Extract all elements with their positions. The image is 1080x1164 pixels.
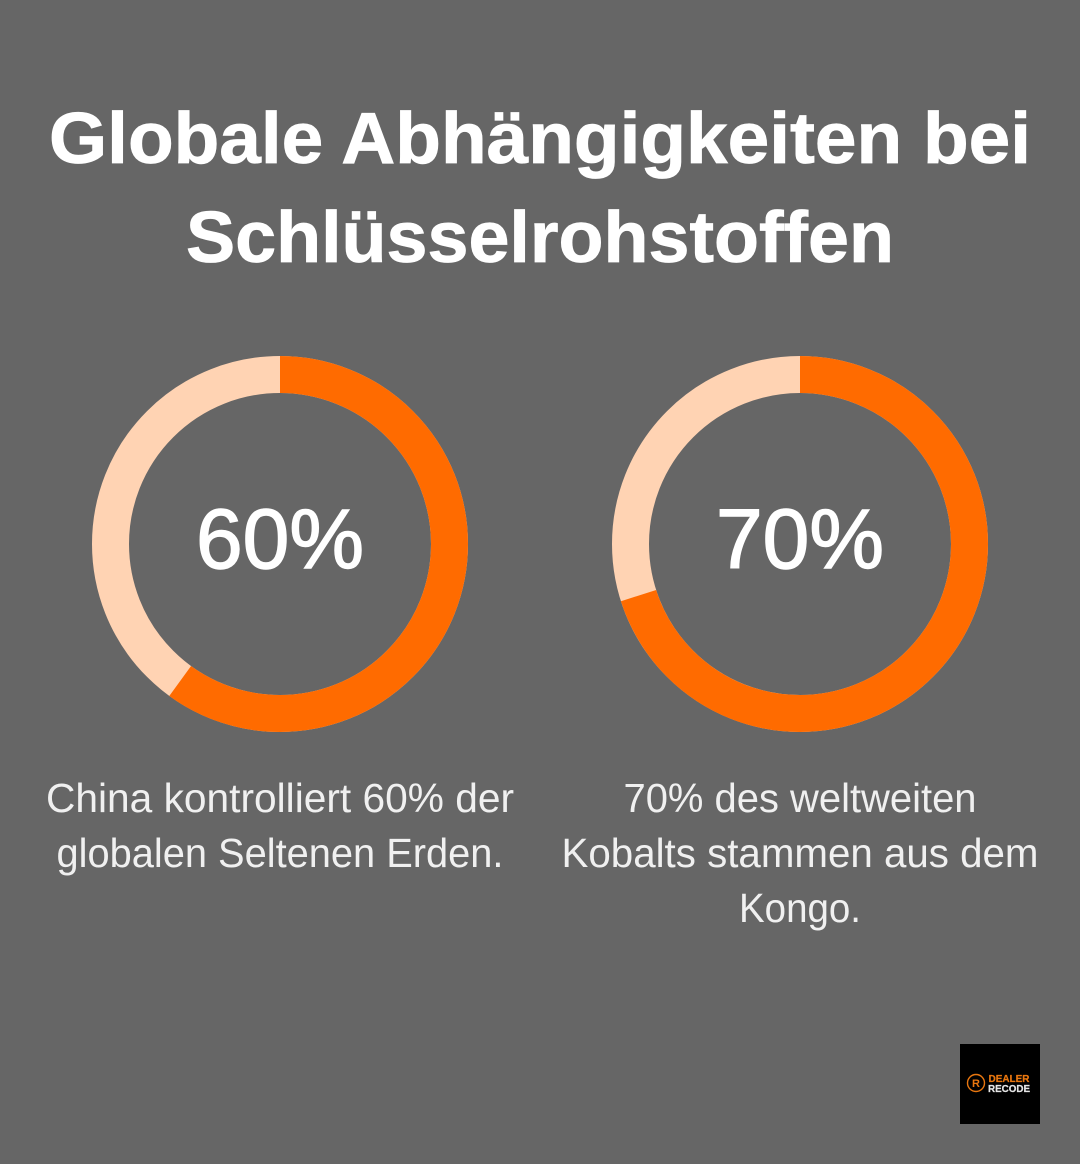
- caption: Kongo: Kobalts stammen aus dem: [562, 830, 1038, 876]
- donut chart: 60%: [110, 374, 450, 714]
- logo: Dealer Recode: RECODE: [988, 1084, 1030, 1095]
- caption: China: globalen Seltenen Erden.: [56, 830, 504, 876]
- title: Globale Abhängigkeiten bei: [49, 99, 1031, 179]
- title: [49, 99, 1031, 278]
- caption: Kongo: 70% des weltweiten: [624, 775, 976, 821]
- logo: Dealer Recode: DEALER: [988, 1074, 1030, 1085]
- donut chart: 60%: 60%: [196, 492, 364, 586]
- logo: Dealer Recode: R: [972, 1078, 980, 1090]
- donut chart: 70%: 70%: [716, 492, 884, 586]
- title: Schlüsselrohstoffen: [186, 198, 894, 278]
- caption: China: China kontrolliert 60% der: [46, 775, 514, 821]
- caption: Kongo: Kongo.: [739, 885, 861, 931]
- caption: China: [46, 775, 514, 876]
- donut chart: 70%: [630, 374, 970, 714]
- logo: Dealer Recode: [960, 1044, 1040, 1124]
- caption: Kongo: [562, 775, 1038, 931]
